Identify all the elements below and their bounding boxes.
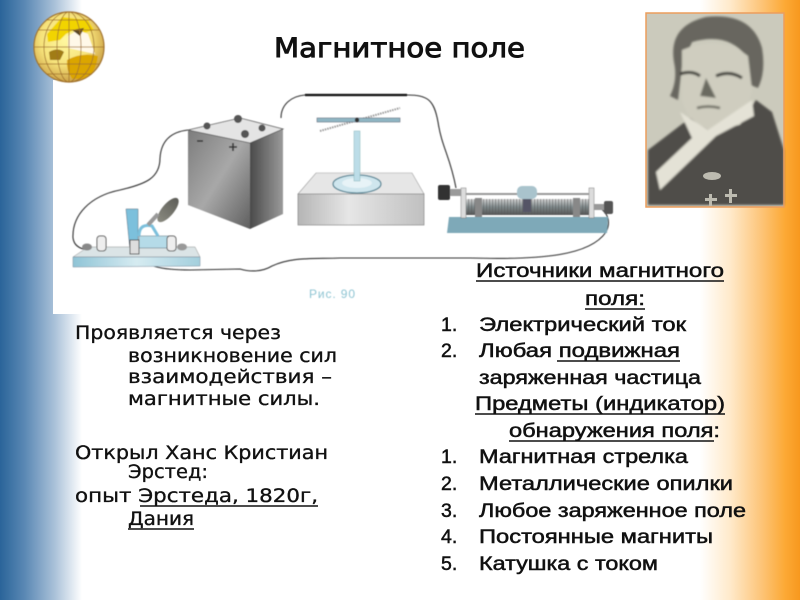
text block: magnetic forces description: возникновение сил [128, 345, 337, 367]
battery [188, 115, 283, 229]
portrait of Oersted [646, 13, 784, 207]
text block: field detection indicators: 2. [441, 473, 457, 495]
text block: field detection indicators: 4. [441, 526, 457, 548]
coat [648, 100, 784, 205]
text block: magnetic forces description: магнитные силы. [128, 388, 320, 410]
text block: field detection indicators: 3. [441, 500, 457, 522]
compass needle on stand [298, 108, 424, 225]
text block: magnetic forces description: Проявляется через [75, 322, 281, 344]
figure caption: Рис. 90 [309, 287, 355, 301]
text block: field detection indicators [441, 393, 746, 575]
text block: field detection indicators: Металлические опилки [479, 473, 733, 495]
icon: golden globe [34, 12, 104, 82]
text block: magnetic forces description: взаимодействия – [128, 366, 332, 388]
text block: discovery by Oersted: Эрстед: [128, 461, 208, 483]
text block: field detection indicators: Магнитная стрелка [479, 446, 688, 468]
text block: field detection indicators: Любое заряженное поле [479, 500, 746, 522]
text block: field detection indicators: Катушка с током [479, 553, 658, 575]
face [682, 43, 752, 130]
text block: sources of magnetic field [441, 260, 724, 389]
text block: sources of magnetic field: Любая подвижная [479, 340, 680, 362]
title: Магнитное поле [274, 33, 525, 64]
text block: magnetic forces description [75, 322, 337, 410]
text block: sources of magnetic field: Электрический ток [479, 314, 687, 336]
text block: field detection indicators: 1. [441, 446, 457, 468]
text block: sources of magnetic field: Источники магнитного [476, 260, 724, 282]
text block: field detection indicators: Предметы (индикатор) [475, 393, 725, 415]
text block: discovery by Oersted: Открыл Ханс Кристиан [75, 442, 328, 464]
text block: sources of magnetic field: 2. [441, 340, 457, 362]
knife switch [73, 195, 200, 267]
text block: sources of magnetic field: заряженная частица [479, 367, 701, 389]
text block: field detection indicators: 5. [441, 553, 457, 575]
rheostat [438, 185, 613, 233]
panel: Oersted experiment diagram [73, 95, 613, 301]
text block: field detection indicators: обнаружения поля: [509, 420, 720, 442]
wires of the circuit [73, 95, 608, 271]
text block: discovery by Oersted: опыт Эрстеда, 1820г, [75, 485, 318, 507]
text block: field detection indicators: Постоянные магниты [479, 526, 713, 548]
text block: sources of magnetic field: поля: [585, 288, 645, 310]
text block: discovery by Oersted: Дания [128, 508, 194, 530]
text block: discovery by Oersted [75, 442, 328, 530]
shirt collar [656, 100, 754, 190]
text block: sources of magnetic field: 1. [441, 314, 457, 336]
hair [670, 16, 763, 100]
